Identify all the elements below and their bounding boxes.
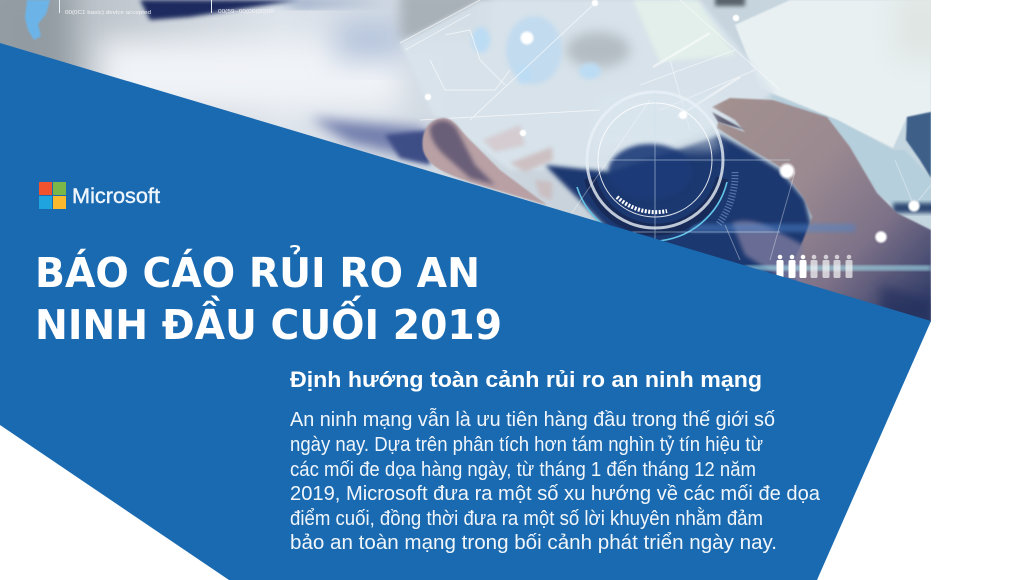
top-left map fragment and captions: 00(0C1 basic) device accepted <box>65 10 151 16</box>
title: NINH ĐẦU CUỐI 2019 <box>35 295 502 349</box>
body paragraph: điểm cuối, đồng thời đưa ra một số lời khuyên nhằm đảm <box>290 507 763 530</box>
body paragraph: 2019, Microsoft đưa ra một số xu hướng về các mối đe dọa <box>290 483 821 505</box>
title: BÁO CÁO RỦI RO AN <box>35 244 480 297</box>
body paragraph: ngày nay. Dựa trên phân tích hơn tám nghìn tỷ tín hiệu từ <box>290 434 763 456</box>
title <box>35 244 502 349</box>
circular HUD <box>540 92 931 260</box>
light streak and people row <box>745 255 931 278</box>
glowing nodes <box>424 0 921 244</box>
phone at right edge <box>906 112 931 178</box>
left hand fingers <box>422 118 547 205</box>
icon: Microsoft four-colour squares <box>39 182 66 209</box>
tablet hologram <box>400 0 775 170</box>
body paragraph: các mối đe dọa hàng ngày, từ tháng 1 đến tháng 12 năm <box>290 459 756 481</box>
top-left map fragment and captions <box>25 0 274 40</box>
body paragraph <box>290 408 821 554</box>
body paragraph: An ninh mạng vẫn là ưu tiên hàng đầu trong thế giới số <box>290 408 775 431</box>
photo: hands using a holographic tablet <box>0 0 945 325</box>
right hand <box>712 98 931 325</box>
dark desk under the hands <box>544 132 812 281</box>
desk blurred background tones <box>0 0 490 165</box>
subheading: Định hướng toàn cảnh rủi ro an ninh mạng <box>290 367 762 392</box>
top-left map fragment and captions: 00(59--00(00(00)00 <box>218 9 274 15</box>
wordmark: Microsoft <box>72 185 160 208</box>
body paragraph: bảo an toàn mạng trong bối cảnh phát triển ngày nay. <box>290 532 777 554</box>
laptop top right <box>735 0 931 148</box>
Microsoft logo <box>39 182 160 209</box>
